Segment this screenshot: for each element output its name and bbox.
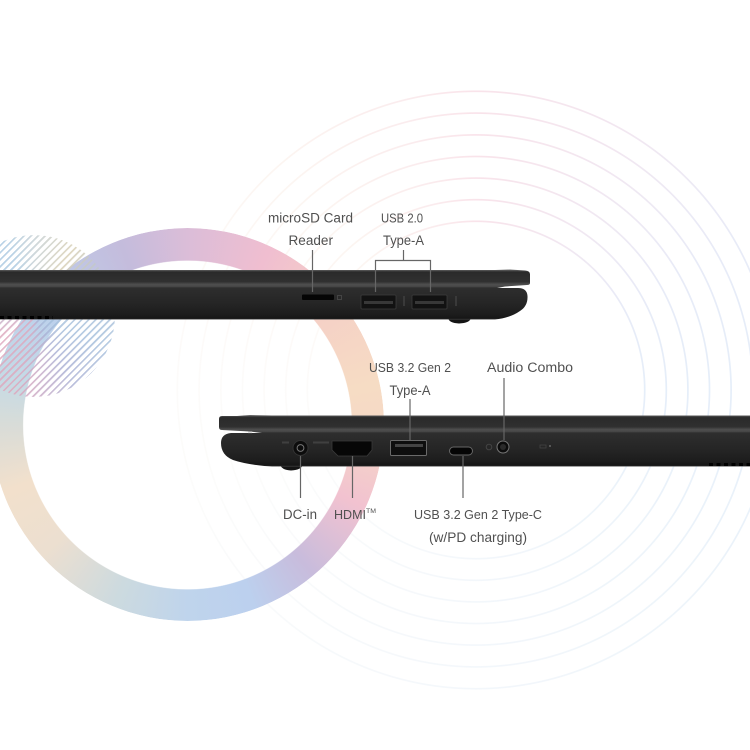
USB 2.0 port 1	[361, 295, 396, 309]
hinge highlight	[248, 432, 252, 433]
label: Audio Combo: Audio Combo	[487, 360, 573, 375]
gradient ring	[0, 228, 384, 620]
bottom laptop rubber foot ticks	[709, 463, 750, 466]
label: trademark: TM	[366, 508, 376, 515]
USB symbol 1	[403, 296, 405, 306]
DC-in leader	[300, 456, 302, 498]
bottom laptop base	[221, 433, 750, 466]
small DC and HDMI port marks	[282, 442, 329, 444]
status LED icons	[540, 445, 551, 448]
label: w/PD charging: (w/PD charging)	[429, 530, 527, 545]
DC-in jack	[293, 440, 308, 456]
label: Type-A (USB 3.2): Type-A	[390, 383, 430, 398]
label: USB 3.2 Gen 2 Type-C: USB 3.2 Gen 2 Type-C	[414, 508, 542, 522]
top laptop lid	[0, 270, 530, 288]
bottom laptop rear foot	[280, 464, 303, 470]
label: USB 2.0: USB 2.0	[381, 212, 423, 226]
label: Reader: Reader	[288, 233, 334, 248]
top laptop rubber foot ticks	[0, 316, 53, 319]
headset icon	[486, 444, 492, 450]
HDMI leader	[352, 456, 354, 498]
USB-C leader	[462, 456, 464, 498]
top laptop rear foot	[448, 318, 471, 324]
USB 3.2 Type-A leader	[409, 399, 411, 440]
leader lines	[300, 250, 504, 498]
bottom laptop lid	[219, 415, 750, 433]
label: microSD Card: microSD Card	[268, 210, 353, 226]
label: USB 3.2 Gen 2: USB 3.2 Gen 2	[369, 361, 451, 375]
microSD slot	[302, 294, 334, 300]
USB 2.0 bracket	[376, 250, 430, 292]
USB-C port	[450, 447, 472, 455]
audio jack	[497, 441, 509, 453]
microSD leader	[312, 250, 314, 292]
hatched circle	[0, 235, 115, 397]
microSD icon	[338, 296, 342, 300]
top laptop base	[0, 288, 528, 320]
label: DC-in: DC-in	[283, 507, 317, 522]
audio combo leader	[503, 378, 505, 440]
USB 3.2 Type-A port	[390, 440, 426, 456]
bottom laptop	[219, 415, 750, 470]
background concentric rings	[176, 90, 750, 690]
HDMI port	[332, 441, 372, 456]
top laptop	[0, 270, 530, 324]
label: HDMI: HDMI	[334, 508, 366, 522]
USB 2.0 port 2	[412, 295, 447, 309]
USB symbol 2	[455, 296, 457, 306]
label: Type-A (USB 2.0): Type-A	[383, 233, 424, 248]
